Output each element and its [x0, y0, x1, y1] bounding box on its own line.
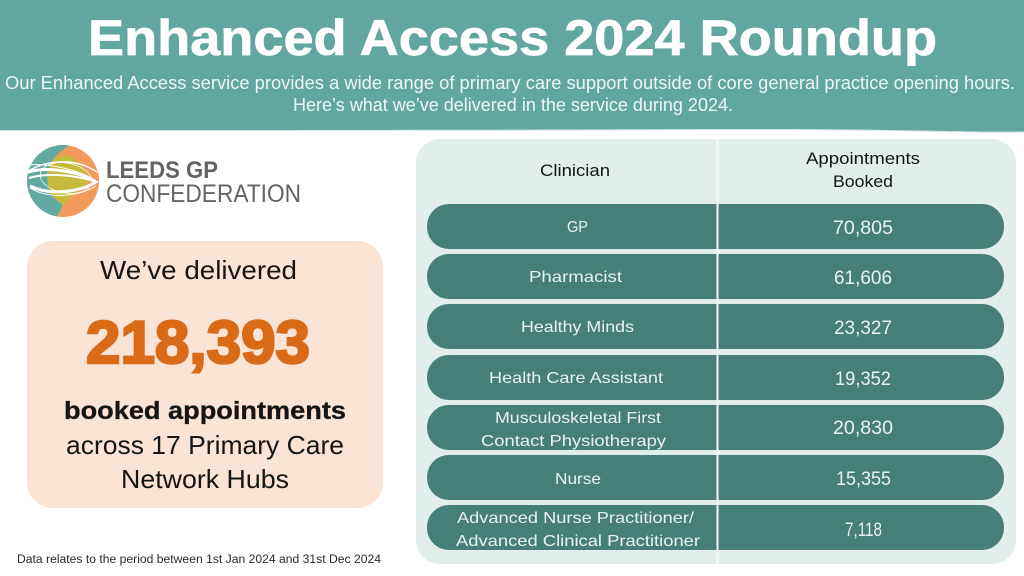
header intro text: Our Enhanced Access service provides a wide range of primary care support outside of core general practice opening hours. — [5, 73, 1015, 93]
big number: 218,393 — [86, 309, 310, 376]
footnote: Data relates to the period between 1st Jan 2024 and 31st Dec 2024 — [17, 554, 382, 566]
title: Enhanced Access 2024 Roundup — [88, 10, 937, 66]
row: Pharmacist: 61,606 — [834, 268, 892, 289]
hubs text: across 17 Primary Care — [66, 430, 344, 460]
column heading: appointments booked: Appointments — [806, 150, 920, 168]
row: Pharmacist: Pharmacist — [529, 269, 623, 286]
logo: Leeds GP Confederation — [27, 145, 301, 217]
column heading: clinician: Clinician — [540, 162, 610, 180]
intro text: We’ve delivered — [100, 255, 297, 285]
row: Advanced Nurse / Clinical Practitioner: 7,118 — [845, 520, 882, 541]
row: Musculoskeletal First Contact Physiotherapy: Contact Physiotherapy — [481, 433, 666, 450]
row: Healthy Minds: 23,327 — [834, 318, 892, 339]
column heading: appointments booked: Booked — [833, 173, 893, 191]
row: Advanced Nurse / Clinical Practitioner: Advanced Clinical Practitioner — [456, 533, 701, 550]
panel: clinician table — [416, 139, 1016, 564]
logo wordmark: LEEDS GP — [106, 157, 218, 184]
row: Pharmacist — [427, 254, 1004, 299]
row: Health Care Assistant: Health Care Assistant — [489, 370, 664, 387]
row: Nurse: 15,355 — [836, 469, 891, 490]
hubs text: Network Hubs — [121, 464, 289, 494]
row: Musculoskeletal First Contact Physiotherapy: 20,830 — [833, 418, 893, 439]
row: GP: GP — [567, 219, 588, 236]
header intro text: Here’s what we’ve delivered in the service during 2024. — [293, 95, 733, 115]
row: Nurse: Nurse — [555, 471, 601, 488]
icon: globe — [27, 145, 99, 217]
header intro text — [5, 73, 1015, 115]
hubs text — [66, 430, 344, 494]
row: Advanced Nurse / Clinical Practitioner: Advanced Nurse Practitioner/ — [457, 510, 695, 527]
row: Healthy Minds — [427, 304, 1004, 349]
column heading: appointments booked — [806, 150, 920, 191]
row: Healthy Minds: Healthy Minds — [521, 319, 634, 336]
logo wordmark: CONFEDERATION — [106, 180, 301, 208]
row: Nurse — [427, 455, 1004, 500]
row: Musculoskeletal First Contact Physiotherapy: Musculoskeletal First — [495, 410, 662, 427]
panel: headline total — [27, 241, 383, 508]
header banner — [0, 0, 1024, 133]
row: Musculoskeletal First Contact Physiotherapy — [427, 405, 1004, 450]
row: GP: 70,805 — [833, 218, 893, 239]
logo wordmark — [106, 157, 301, 208]
row: Health Care Assistant — [427, 355, 1004, 400]
booked appointments: booked appointments — [64, 397, 346, 425]
row: Advanced Nurse / Clinical Practitioner — [427, 505, 1004, 550]
row: GP — [427, 204, 1004, 249]
row: Health Care Assistant: 19,352 — [835, 369, 891, 390]
